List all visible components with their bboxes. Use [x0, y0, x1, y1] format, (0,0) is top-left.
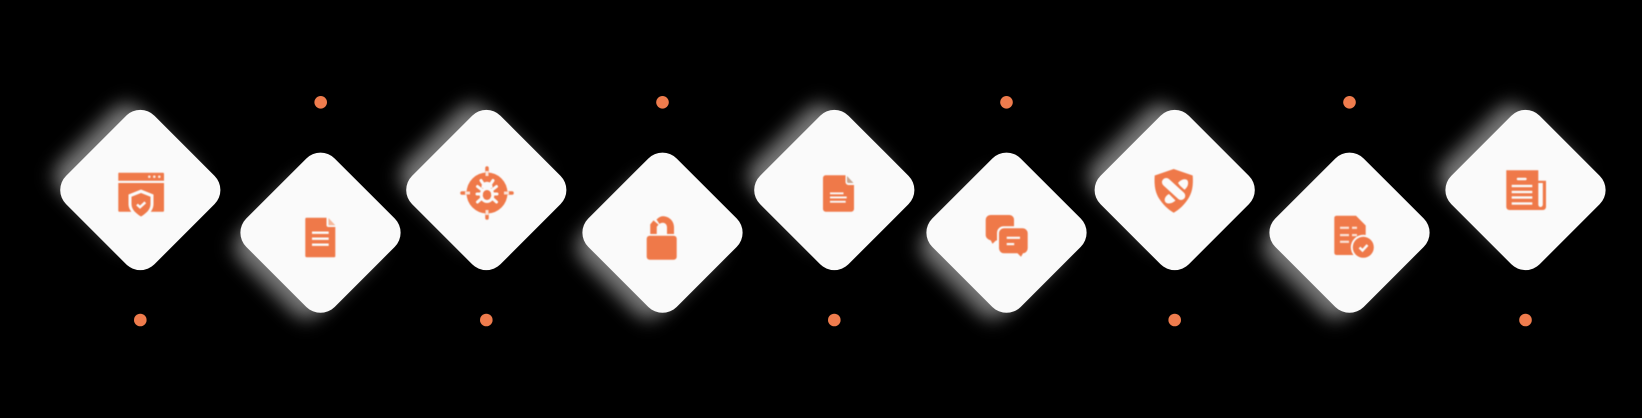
step 3: bug target	[393, 97, 575, 278]
icon: document with lines	[305, 218, 335, 257]
step 5: document	[741, 97, 923, 278]
icon: padlock	[647, 216, 677, 260]
icon: patched shield	[1155, 169, 1193, 213]
icon: bug in crosshair	[462, 168, 512, 218]
step 4: open padlock	[569, 144, 751, 326]
top timeline dots	[314, 96, 1356, 109]
step 7: shield with bandage	[1082, 97, 1263, 278]
icon: newspaper	[1506, 170, 1546, 210]
step 2: document	[227, 144, 409, 326]
step 9: newspaper	[1432, 97, 1614, 278]
step 6: chat bubbles	[913, 144, 1095, 326]
icon: approved document	[1334, 216, 1376, 260]
icon: speech bubbles	[986, 215, 1030, 257]
bottom timeline dots	[134, 314, 1532, 326]
icon: browser window with shield	[118, 173, 164, 220]
step 1: browser shield	[47, 97, 229, 278]
icon: document with short lines	[823, 175, 854, 212]
step 8: document with check	[1256, 144, 1438, 326]
